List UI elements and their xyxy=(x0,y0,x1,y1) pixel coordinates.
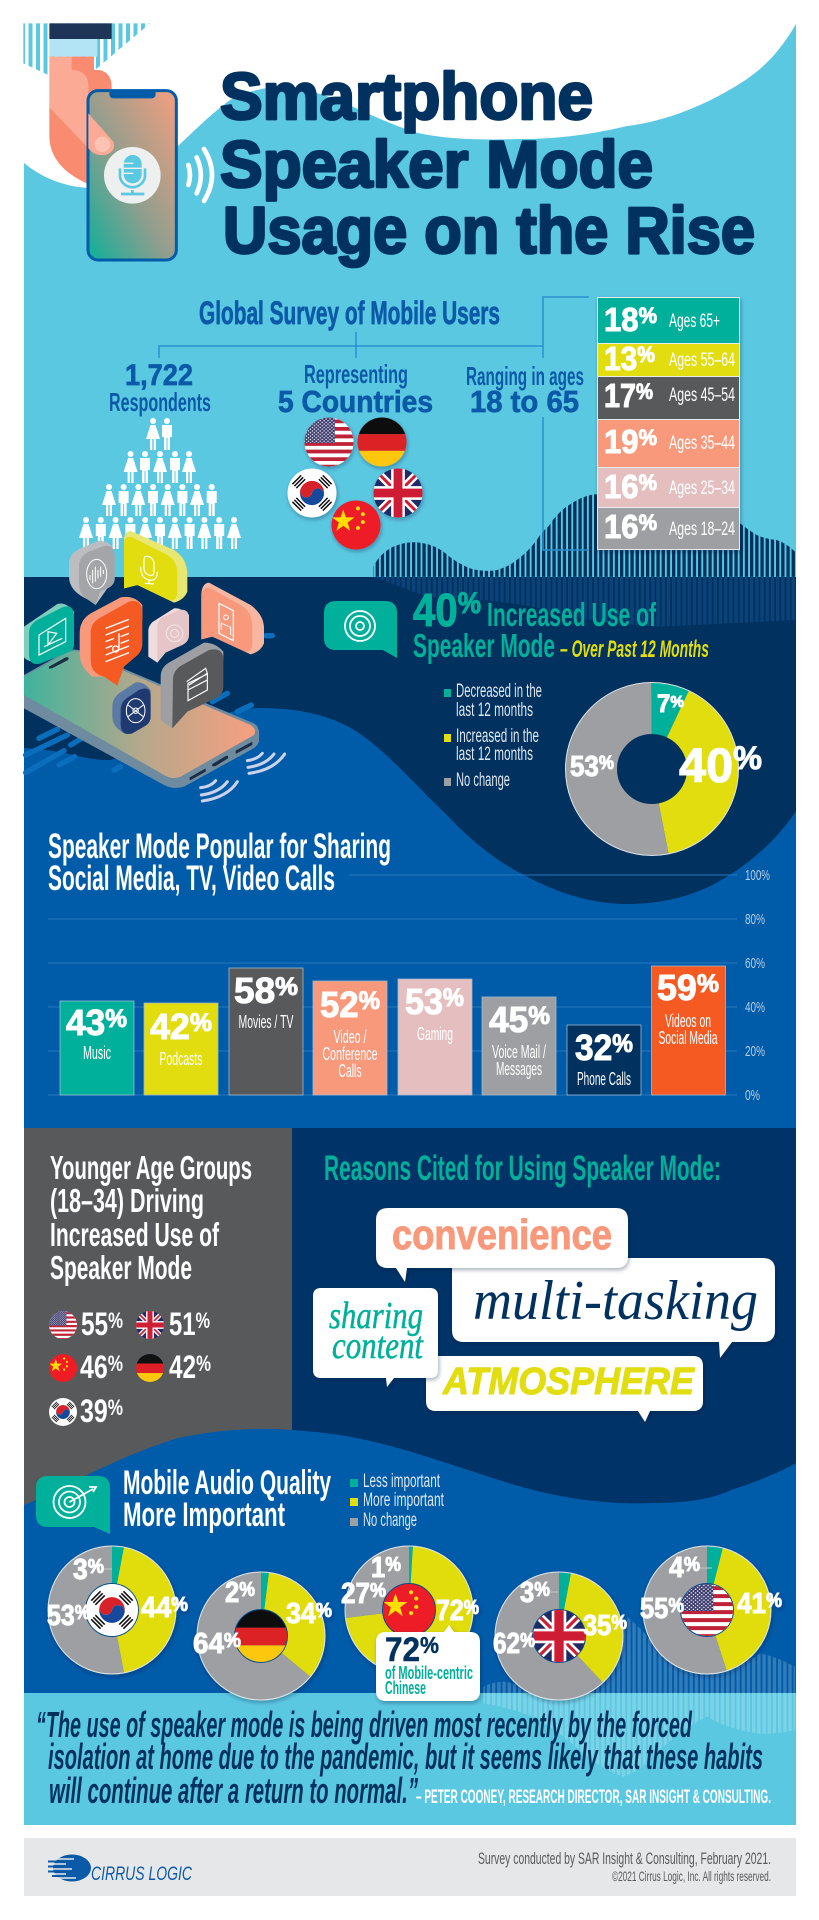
stat: germany: % xyxy=(196,1351,211,1376)
sound waves xyxy=(188,149,212,201)
sleeve background stripes xyxy=(23,23,150,75)
bar: voice mail / messages xyxy=(482,997,556,1095)
survey heading: Global Survey of Mobile Users xyxy=(199,295,500,331)
bar: movies / tv xyxy=(229,968,303,1095)
legend: Decreased in the xyxy=(456,681,542,702)
donut chart: germany: 64 xyxy=(193,1628,225,1660)
redrawn finger tip xyxy=(88,113,114,155)
donut chart: china: % xyxy=(464,1597,479,1619)
heading: Increased Use of xyxy=(487,596,657,633)
sleeve xyxy=(49,39,97,57)
bar: video / conference calls: 52 xyxy=(320,984,360,1025)
donut chart: united states: 41 xyxy=(737,1588,769,1620)
speech bubble: multi-tasking: multi-tasking xyxy=(473,1270,758,1332)
speech bubble: atmosphere: ATMOSPHERE xyxy=(442,1361,696,1403)
bar: voice mail / messages: Messages xyxy=(496,1059,542,1079)
bar: podcasts: % xyxy=(190,1009,212,1037)
callout: 72% of mobile-centric chinese xyxy=(376,1625,480,1701)
logo: cirrus logic xyxy=(48,1854,192,1885)
legend xyxy=(350,1471,444,1531)
section heading: mobile audio quality xyxy=(36,1464,444,1534)
callout: 72% of mobile-centric chinese: 72 xyxy=(385,1631,423,1669)
legend: Less important xyxy=(363,1471,440,1492)
bar: movies / tv: Movies / TV xyxy=(238,1012,294,1032)
stat: germany: 42 xyxy=(169,1349,205,1385)
donut chart: united states: % xyxy=(668,1595,684,1617)
row: ages 35-44: % xyxy=(639,425,657,450)
finger nail xyxy=(95,137,110,152)
bar: video / conference calls: % xyxy=(359,987,380,1015)
donut chart: usage change xyxy=(566,682,762,856)
bubble: navigation, navy xyxy=(112,682,151,734)
section: global survey of mobile users xyxy=(109,295,589,550)
bar: phone calls: 32 xyxy=(575,1027,615,1068)
row: ages 18-24: 16 xyxy=(604,508,641,545)
bar: voice mail / messages: Voice Mail / xyxy=(492,1042,546,1062)
donut chart: usage change: % xyxy=(599,753,614,774)
white curved header shape xyxy=(24,24,796,188)
donut chart: south korea: 44 xyxy=(141,1592,173,1624)
donut chart: united states: 55 xyxy=(640,1593,672,1625)
heading: Speaker Mode xyxy=(413,627,555,664)
legend: No change xyxy=(456,770,510,791)
phone ports xyxy=(49,657,252,781)
row: ages 65+: % xyxy=(639,303,657,328)
bubble: audio wave, gray xyxy=(69,541,115,605)
connector lines xyxy=(159,297,589,550)
faint stripes in navy xyxy=(373,577,795,627)
donut chart: south korea: 53 xyxy=(47,1600,79,1632)
row: ages 55-64: Ages 55–64 xyxy=(669,350,735,371)
stat: germany xyxy=(136,1349,211,1385)
panel: medium blue wave for audio quality xyxy=(24,1429,796,1693)
stat: uk: 51 xyxy=(169,1306,205,1342)
section: bar chart heading xyxy=(48,827,391,898)
donut chart: china: % xyxy=(370,1580,386,1602)
row: ages 25-34: % xyxy=(639,470,657,495)
panel: reasons background xyxy=(292,1128,796,1528)
legend xyxy=(444,681,542,791)
callout: 72% of mobile-centric chinese: of Mobile-centric xyxy=(385,1663,473,1683)
countries stat: Representing xyxy=(304,359,408,389)
respondents stat xyxy=(109,359,211,417)
flags: five surveyed countries xyxy=(288,418,422,550)
callout: 72% of mobile-centric chinese: % xyxy=(420,1632,439,1658)
bar: music: 43 xyxy=(66,1002,106,1043)
donut chart: united kingdom: % xyxy=(611,1612,627,1634)
donut chart: germany xyxy=(193,1572,332,1700)
bubble: video player, teal xyxy=(24,604,74,664)
age range stat: Ranging in ages xyxy=(466,361,584,391)
illustration: isometric phone with app bubbles xyxy=(24,531,285,801)
stat: korea: % xyxy=(108,1395,123,1420)
donut chart: united states: % xyxy=(684,1554,700,1576)
bar chart: speaker mode usage by activity xyxy=(48,867,770,1104)
speech bubble: multi-tasking xyxy=(452,1258,775,1358)
bar: gaming: Gaming xyxy=(417,1024,453,1044)
finger xyxy=(49,57,114,155)
donut chart: germany: % xyxy=(316,1600,332,1622)
row: ages 35-44: Ages 35–44 xyxy=(669,433,735,454)
callout: 72% of mobile-centric chinese: Chinese xyxy=(385,1678,426,1698)
chart gridlines and axis: 80% xyxy=(745,911,765,928)
list: country percentages for younger users xyxy=(49,1306,211,1429)
chart gridlines and axis: 20% xyxy=(745,1043,765,1060)
bar: voice mail / messages: % xyxy=(528,1002,550,1030)
donut chart: usage change: 40 xyxy=(679,740,732,793)
bar: movies / tv: 58 xyxy=(234,970,274,1011)
title: Speaker Mode xyxy=(220,127,653,201)
donut chart: usage change: 7 xyxy=(657,690,671,718)
title: Usage on the Rise xyxy=(223,193,755,267)
donut chart: china xyxy=(341,1546,479,1674)
bubble: phone contact, salmon xyxy=(201,583,264,654)
phone sound arcs xyxy=(201,753,285,801)
panel: younger age groups background xyxy=(24,1128,292,1528)
icon: target bubble xyxy=(36,1476,110,1534)
donut chart: germany: % xyxy=(224,1630,241,1652)
chart gridlines and axis: 40% xyxy=(745,999,765,1016)
bar: videos on social media: Social Media xyxy=(658,1028,718,1048)
row: ages 65+ xyxy=(598,298,739,343)
section: bar chart heading: Speaker Mode Popular for Sharing xyxy=(48,827,391,866)
row: ages 35-44: 19 xyxy=(604,423,641,460)
bar: video / conference calls: Video / xyxy=(334,1027,366,1047)
donut chart: china: 72 xyxy=(436,1595,468,1627)
text block: younger age groups heading: Increased Use of xyxy=(50,1216,220,1253)
heading xyxy=(413,584,657,664)
icon: respondents pyramid xyxy=(79,418,241,549)
bar: gaming: % xyxy=(443,984,464,1012)
bar: videos on social media: % xyxy=(697,970,719,998)
heading text xyxy=(123,1464,331,1534)
row: ages 45-54: % xyxy=(636,379,653,404)
panel: footer xyxy=(24,1838,796,1896)
text block: younger age groups heading: (18–34) Driving xyxy=(50,1182,204,1219)
bubble: speaker, pink xyxy=(148,608,189,663)
phone body xyxy=(24,649,259,788)
chart gridlines and axis: 100% xyxy=(745,867,770,884)
respondents stat: 1,722 xyxy=(125,359,193,392)
bar: podcasts: Podcasts xyxy=(160,1049,202,1069)
faint waveform stripes xyxy=(483,1617,795,1777)
donut chart: united kingdom: % xyxy=(520,1630,535,1652)
bar: phone calls: % xyxy=(612,1030,633,1058)
row: ages 55-64: % xyxy=(637,342,655,367)
heading text: More Important xyxy=(123,1496,285,1534)
donut chart: south korea xyxy=(47,1546,188,1674)
donut chart: united states: 4 xyxy=(669,1552,685,1584)
row: ages 18-24: % xyxy=(639,510,657,535)
quote text: will continue after a return to normal.” xyxy=(49,1770,418,1811)
age range stat xyxy=(466,361,584,419)
countries stat xyxy=(278,359,433,419)
speech bubble: convenience xyxy=(376,1208,628,1282)
stat: uk: % xyxy=(195,1308,210,1333)
row: ages 45-54: 17 xyxy=(604,377,641,414)
quote xyxy=(36,1704,771,1811)
bar: podcasts xyxy=(144,1003,218,1095)
quote text xyxy=(36,1704,763,1811)
bubble: microphone, yellow xyxy=(124,531,187,603)
stat: korea xyxy=(49,1393,123,1429)
legend: last 12 months xyxy=(456,744,533,765)
panel: top light blue background xyxy=(24,24,796,577)
donut chart: united kingdom: 3 xyxy=(520,1577,536,1609)
bar: video / conference calls: Calls xyxy=(338,1061,362,1081)
row: ages 65+: Ages 65+ xyxy=(669,311,720,332)
bar: music: % xyxy=(105,1005,127,1033)
chart gridlines and axis: 0% xyxy=(745,1087,760,1104)
title: Smartphone xyxy=(220,59,593,133)
legend: More important xyxy=(363,1490,444,1511)
donut chart: united kingdom: 35 xyxy=(583,1610,615,1642)
row: ages 18-24 xyxy=(598,508,739,549)
bar: podcasts: 42 xyxy=(150,1006,190,1047)
donut chart: usage change: % xyxy=(733,740,762,776)
subheading: – Over Past 12 Months xyxy=(560,636,709,663)
row: ages 25-34 xyxy=(598,468,739,507)
stat: uk xyxy=(136,1306,210,1342)
stat: china: % xyxy=(108,1351,123,1376)
bar: video / conference calls: Conference xyxy=(322,1044,378,1064)
bar: video / conference calls xyxy=(313,981,387,1095)
panel: navy middle background xyxy=(24,577,796,937)
text block: younger age groups heading: Younger Age Groups xyxy=(50,1149,252,1186)
row: ages 18-24: Ages 18–24 xyxy=(669,519,735,540)
bubble: music note, orange xyxy=(80,597,142,686)
bar: gaming: 53 xyxy=(405,981,445,1022)
bar: gaming xyxy=(398,979,472,1095)
row: ages 35-44 xyxy=(598,420,739,467)
motion dashes xyxy=(26,636,272,773)
donut chart: germany: 2 xyxy=(225,1577,241,1609)
donut chart: south korea: % xyxy=(171,1594,188,1616)
donut chart: usage change: % xyxy=(670,694,684,711)
donut chart: china: 1 xyxy=(371,1552,387,1584)
bar: videos on social media: 59 xyxy=(657,967,697,1008)
bar: voice mail / messages: 45 xyxy=(489,999,529,1040)
speech bubble: sharing content: sharing xyxy=(329,1295,423,1337)
palm xyxy=(49,57,112,183)
bar: phone calls xyxy=(567,1025,641,1095)
chart gridlines and axis xyxy=(48,867,770,1104)
donut chart: china: % xyxy=(385,1554,401,1576)
row: ages 55-64 xyxy=(598,340,739,377)
respondents stat: Respondents xyxy=(109,387,211,417)
heading: 40 xyxy=(413,584,464,636)
bubble: clapboard, dark gray xyxy=(161,643,223,728)
donut chart: south korea: % xyxy=(75,1602,90,1624)
wave stripes behind age table xyxy=(373,494,795,577)
donut chart: germany: % xyxy=(239,1579,255,1601)
bar: music: Music xyxy=(83,1043,111,1063)
countries stat: 5 Countries xyxy=(278,384,433,419)
phone notch xyxy=(109,90,156,98)
row: ages 25-34: 16 xyxy=(604,468,641,505)
donut chart: south korea: 3 xyxy=(73,1554,89,1586)
microphone disc xyxy=(104,147,161,204)
icon: speaker bubble xyxy=(324,601,397,658)
microphone glyph xyxy=(120,155,145,194)
stat: usa: % xyxy=(108,1308,123,1333)
speech bubble: convenience: convenience xyxy=(392,1211,612,1258)
phone body xyxy=(88,91,176,260)
donut chart: usage change: 53 xyxy=(570,751,602,783)
heading: % xyxy=(458,587,481,620)
age range stat: 18 to 65 xyxy=(470,384,579,419)
table: age distribution xyxy=(597,297,740,550)
bar: videos on social media: Videos on xyxy=(665,1011,711,1031)
bar: videos on social media xyxy=(652,966,726,1095)
row: ages 55-64: 13 xyxy=(604,340,641,377)
heading text: Mobile Audio Quality xyxy=(123,1464,331,1502)
title xyxy=(220,59,755,267)
row: ages 25-34: Ages 25–34 xyxy=(669,478,735,499)
donut chart: china: 27 xyxy=(341,1578,373,1610)
text block: younger age groups heading xyxy=(50,1149,252,1286)
bar: phone calls: Phone Calls xyxy=(577,1069,631,1089)
stat: usa: 55 xyxy=(81,1306,117,1342)
donut chart: united kingdom: % xyxy=(534,1579,550,1601)
icon: hand holding phone with microphone xyxy=(23,23,212,260)
donut chart: united states: % xyxy=(766,1590,782,1612)
panel: quote light blue background xyxy=(24,1693,796,1825)
stat: china: 46 xyxy=(80,1349,116,1385)
donut chart: united kingdom xyxy=(493,1572,627,1700)
section: bar chart heading: Social Media, TV, Video Calls xyxy=(48,859,335,898)
legend: last 12 months xyxy=(456,700,533,721)
bar: movies / tv: % xyxy=(275,973,298,1001)
row: ages 65+: 18 xyxy=(604,301,641,338)
donut chart: germany: 34 xyxy=(286,1598,318,1630)
bar: music xyxy=(60,1001,134,1095)
speech bubble: sharing content: content xyxy=(332,1325,424,1367)
stat: usa xyxy=(49,1306,123,1342)
logo: cirrus logic: CIRRUS LOGIC xyxy=(91,1864,192,1885)
stat: korea: 39 xyxy=(80,1393,116,1429)
section: 40% increased use xyxy=(324,584,762,856)
row: ages 45-54: Ages 45–54 xyxy=(669,385,735,406)
row: ages 45-54 xyxy=(598,377,739,419)
speech bubble: sharing content xyxy=(313,1288,438,1387)
phone screen xyxy=(24,651,255,778)
speech bubble: atmosphere xyxy=(426,1356,703,1422)
stat: china xyxy=(49,1349,123,1385)
chart gridlines and axis: 60% xyxy=(745,955,765,972)
donut chart: south korea: % xyxy=(88,1556,104,1578)
legend: Increased in the xyxy=(456,726,539,747)
panel: medium blue background xyxy=(24,708,796,1128)
donut chart: united states xyxy=(640,1546,782,1674)
donut chart: united kingdom: 62 xyxy=(493,1628,525,1660)
legend: No change xyxy=(363,1510,417,1531)
cuff xyxy=(49,23,112,39)
text block: younger age groups heading: Speaker Mode xyxy=(50,1249,192,1286)
